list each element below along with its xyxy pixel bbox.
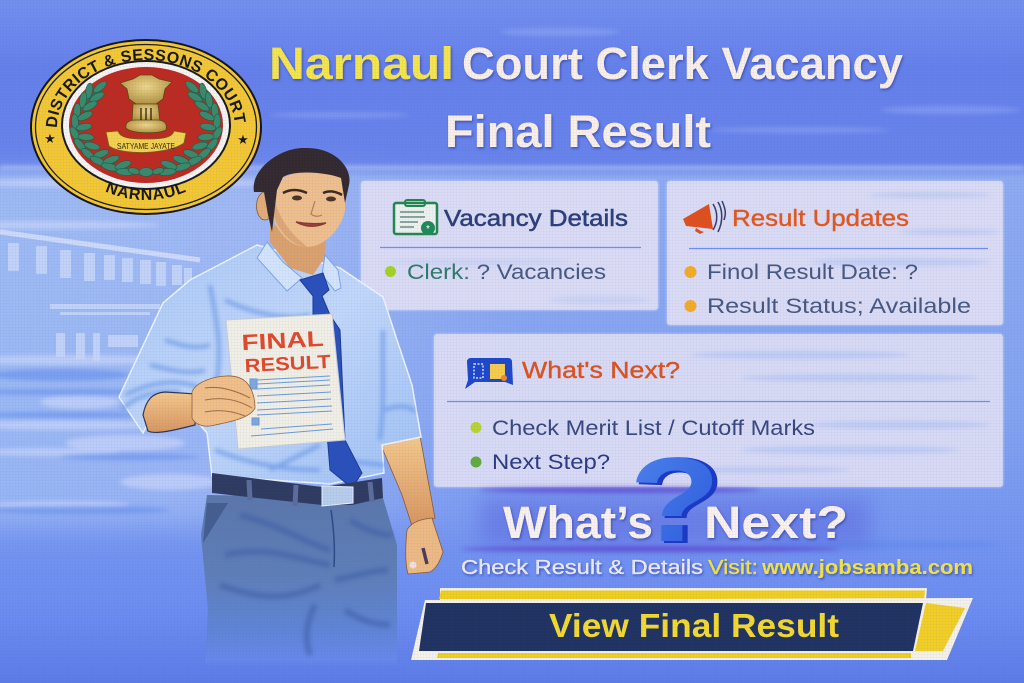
neck: [270, 225, 326, 275]
national emblem: [120, 75, 172, 133]
hair: [254, 148, 350, 232]
wreath: [68, 79, 224, 176]
title: Final Result: Final Result: [445, 106, 711, 157]
motto scroll: SATYAME JAYATE: [117, 142, 175, 151]
right hand: [406, 518, 443, 574]
list item: final result date: Finol Result Date: ?: [707, 261, 918, 284]
icon: question mark: ?: [633, 433, 725, 568]
icon: question mark: ?: [629, 432, 721, 567]
motto scroll: [106, 131, 186, 152]
sheet heading: RESULT: [244, 352, 332, 377]
list item: next step: Next Step?: [492, 451, 610, 474]
icon: chat bubble: [465, 358, 513, 389]
button label: View Final Result: [549, 607, 839, 644]
left hand: [192, 376, 255, 426]
list item: result status: Result Status; Available: [707, 295, 971, 318]
collar: [257, 242, 341, 291]
heading: what's next: What's Next?: [522, 357, 680, 383]
promo: what's next headline: [460, 432, 870, 568]
left forearm: [143, 392, 197, 432]
list item: merit list: Check Merit List / Cutoff Marks: [492, 417, 815, 440]
person holding final result sheet: [119, 148, 443, 665]
title: [269, 38, 903, 157]
seal text: court name: DISTRICT & SESSONS COURT: [46, 48, 246, 127]
heading: vacancy details: Vacancy Details: [444, 205, 628, 231]
panel: what's next: [434, 334, 1003, 487]
panel: result updates: [667, 181, 1003, 325]
tie: [300, 273, 362, 488]
emblem: District and Sessions Court seal: [30, 39, 262, 215]
result sheet: [226, 314, 345, 449]
seal stars: [44, 131, 249, 147]
call to visit website: [461, 557, 973, 579]
trousers: [201, 495, 397, 665]
sheet heading: [241, 326, 332, 377]
title: Court Clerk Vacancy: Court Clerk Vacancy: [462, 38, 903, 89]
seal text: Narnaul: NARNAUL: [106, 181, 186, 200]
belt: [212, 473, 383, 506]
title: Narnaul: Narnaul: [269, 38, 454, 89]
panel: vacancy details: [361, 181, 658, 310]
list item: clerk vacancies: Clerk: ? Vacancies: [407, 261, 606, 284]
headline: Next?: Next?: [704, 497, 848, 548]
icon: clipboard: [394, 200, 437, 235]
shirt: [119, 245, 421, 484]
call to visit website: Visit:: [708, 557, 758, 579]
call to visit website: www.jobsamba.com: [761, 557, 973, 579]
icon: clipboard: *: [426, 224, 430, 235]
icon: megaphone: [683, 201, 725, 234]
sheet lines: [250, 376, 333, 436]
seal stars: ★: [44, 131, 56, 146]
sheet heading: FINAL: [241, 326, 324, 355]
ear: [256, 192, 274, 220]
face: [272, 171, 345, 247]
building columns: [8, 243, 192, 361]
eyes and brows: [283, 190, 342, 226]
heading: result updates: Result Updates: [732, 205, 909, 231]
headline: What's: What’s: [503, 497, 653, 548]
button: view final result: [411, 588, 973, 660]
right forearm: [380, 436, 435, 526]
seal stars: ★: [237, 132, 249, 147]
call to visit website: Check Result & Details: [461, 557, 703, 579]
